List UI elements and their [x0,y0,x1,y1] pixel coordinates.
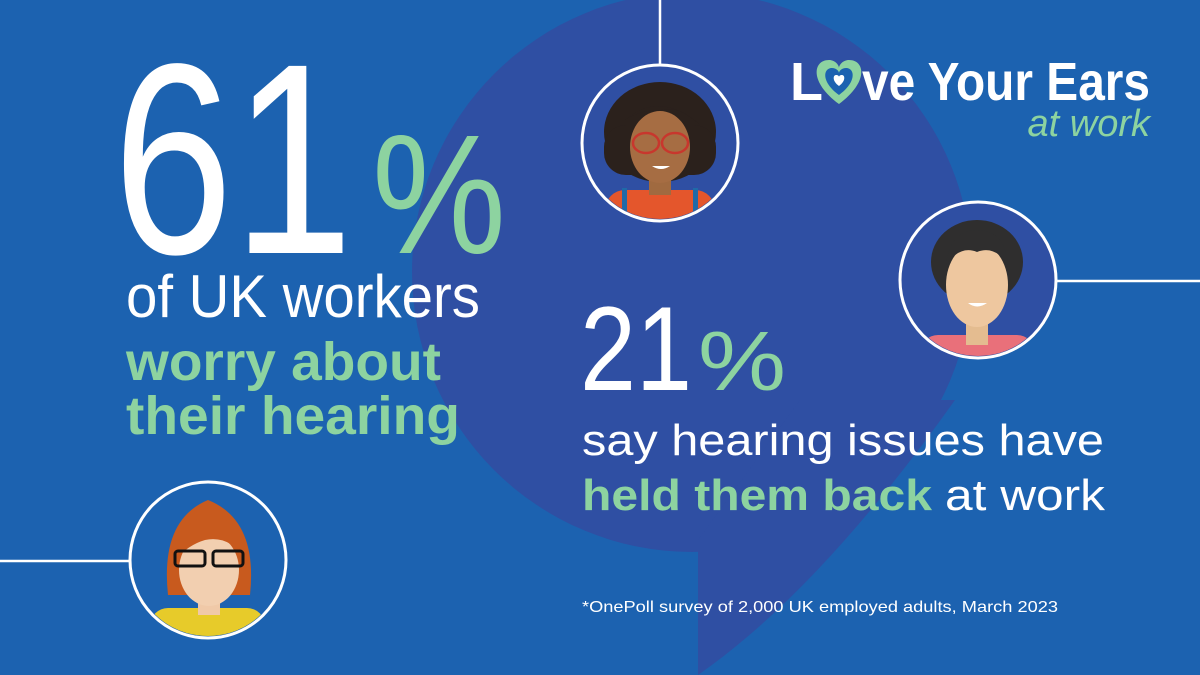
avatar: man [900,202,1056,375]
avatar: woman with glasses [582,65,738,230]
footnote: *OnePoll survey of 2,000 UK employed adults, March 2023 [582,599,1058,616]
stat 21%: 21 [580,282,692,416]
caption 21% [582,416,1106,520]
caption 21%: held them back [582,471,933,520]
stat 61%: 61 [113,7,353,311]
speech bubble [412,0,972,675]
stat 21% [580,282,786,416]
logo [790,52,1152,145]
avatar: redhead with glasses [130,482,286,648]
caption 61%: of UK workers [126,263,480,330]
caption 21%: say hearing issues have [582,416,1104,465]
caption 21%: at work [945,471,1106,520]
logo: L [790,52,822,112]
caption 61%: worry about [125,332,441,392]
icon: heart [817,60,861,104]
caption 61% [125,263,480,446]
stat 61%: % [372,100,506,290]
logo: at work [1028,103,1152,145]
caption 61%: their hearing [126,386,460,446]
stat 21%: % [698,314,786,408]
logo: ve Your Ears [862,52,1150,112]
